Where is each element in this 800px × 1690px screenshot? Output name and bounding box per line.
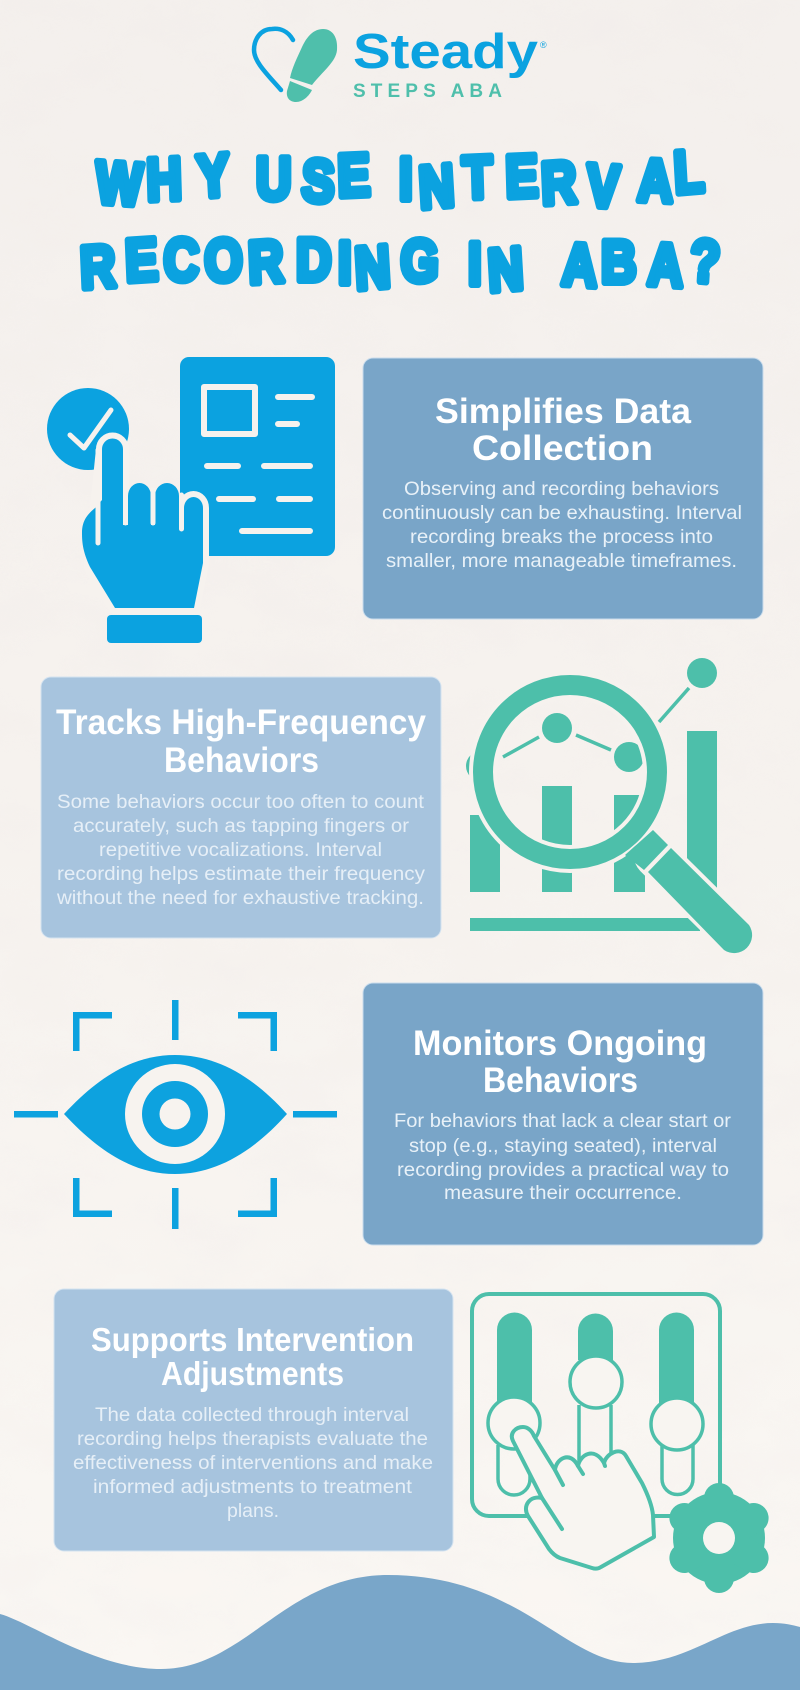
heading: Monitors Ongoing — [413, 1024, 707, 1063]
handle neck — [625, 830, 668, 870]
body text: recording helps estimate their frequency — [57, 864, 426, 885]
body text: Some behaviors occur too often to count — [57, 792, 425, 813]
control board — [472, 1294, 720, 1516]
body text: recording provides a practical way to — [397, 1160, 729, 1181]
lens cut-out — [483, 685, 657, 859]
handle — [648, 848, 752, 953]
panel: simplifies data collection — [363, 358, 763, 619]
heading: Behaviors — [164, 741, 319, 780]
heading — [56, 703, 427, 780]
hand — [82, 438, 203, 608]
gear — [673, 1492, 765, 1584]
logo: Steady Steps ABA — [254, 25, 547, 102]
logo wordmark: Steady — [353, 25, 538, 79]
body text: For behaviors that lack a clear start or — [394, 1111, 732, 1132]
iris — [125, 1064, 225, 1164]
title: RECORDING — [79, 225, 440, 303]
heading — [435, 392, 692, 468]
icon: heart outline — [254, 29, 293, 90]
focus ticks — [14, 1000, 337, 1229]
logo subtitle: STEPS ABA — [353, 81, 502, 102]
check circle — [47, 388, 129, 470]
panel: supports intervention adjustments — [54, 1289, 453, 1551]
icon: magnifying glass over chart — [466, 658, 752, 953]
body text: effectiveness of interventions and make — [73, 1453, 433, 1474]
finger separators — [98, 450, 182, 543]
sleeve cuff — [107, 615, 202, 643]
heading: Supports Intervention — [91, 1321, 414, 1358]
panel: monitors ongoing behaviors — [363, 983, 763, 1245]
title: INTERVAL — [399, 136, 706, 222]
hand detail lines — [542, 1463, 605, 1529]
body text: without the need for exhaustive tracking. — [56, 888, 424, 909]
title: WHY — [94, 140, 232, 219]
slider knobs — [488, 1356, 703, 1450]
hand halo — [90, 438, 203, 608]
footer wave — [0, 1575, 800, 1690]
icon: hand tapping checklist — [47, 357, 335, 643]
heading: Adjustments — [161, 1355, 344, 1392]
handle cut-out — [655, 856, 737, 937]
bars — [470, 731, 717, 892]
chart baseline — [470, 918, 700, 931]
body text — [394, 1111, 732, 1204]
eye shape — [64, 1055, 287, 1174]
focus corners — [73, 1012, 277, 1217]
panel: tracks high-frequency behaviors — [41, 677, 441, 938]
body text: informed adjustments to treatment — [93, 1477, 413, 1498]
heading — [413, 1024, 707, 1100]
body text: Observing and recording behaviors — [404, 479, 719, 500]
registered mark: ® — [540, 40, 547, 50]
body text: plans. — [227, 1501, 279, 1522]
title — [79, 136, 722, 305]
check mark — [70, 410, 111, 448]
body text: smaller, more manageable timeframes. — [386, 551, 737, 572]
icon: eye in focus frame — [14, 1000, 337, 1229]
body text: repetitive vocalizations. Interval — [99, 840, 382, 861]
heading: Collection — [472, 429, 653, 468]
heading: Tracks High-Frequency — [56, 703, 427, 742]
body text: recording helps therapists evaluate the — [77, 1429, 428, 1450]
heading: Simplifies Data — [435, 392, 692, 431]
hand outline — [512, 1427, 654, 1569]
icon: footprint heel — [287, 81, 312, 102]
heading — [91, 1321, 414, 1392]
document lines — [204, 387, 312, 531]
body text: recording breaks the process into — [410, 527, 713, 548]
title: IN — [468, 230, 525, 305]
body text — [382, 479, 742, 572]
body text: stop (e.g., staying seated), interval — [409, 1136, 717, 1157]
document card — [180, 357, 335, 556]
lens ring — [483, 685, 657, 859]
body text — [73, 1405, 433, 1522]
body text: The data collected through interval — [95, 1405, 409, 1426]
title: USE — [256, 140, 371, 216]
body text — [56, 792, 426, 909]
heading: Behaviors — [483, 1061, 638, 1100]
title: ABA? — [560, 226, 722, 300]
chart line and points — [466, 658, 717, 781]
body text: continuously can be exhausting. Interval — [382, 503, 742, 524]
icon: hand adjusting sliders with gear — [472, 1294, 765, 1584]
slider tracks — [497, 1312, 694, 1495]
body text: measure their occurrence. — [444, 1183, 682, 1204]
body text: accurately, such as tapping fingers or — [73, 816, 410, 837]
icon: footprint sole — [290, 29, 337, 85]
